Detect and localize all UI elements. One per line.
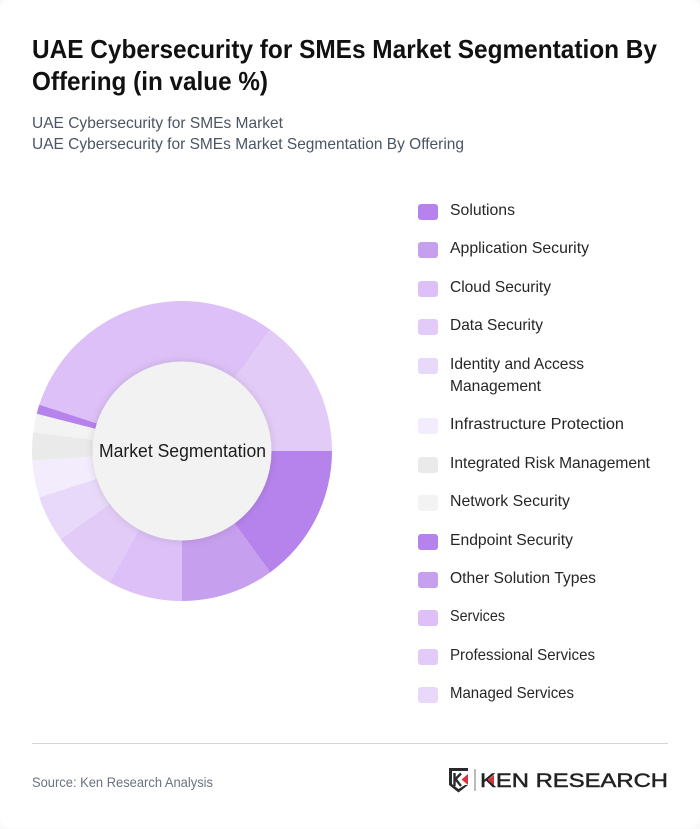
icon: shield (449, 768, 468, 792)
legend item: Identity and Access Management: Identity and Access (450, 356, 584, 373)
centre label: Market Segmentation (99, 441, 266, 461)
legend item: Services: Services (450, 608, 505, 625)
segment: Data Security (61, 451, 182, 582)
subtitle: UAE Cybersecurity for SMEs Market (32, 115, 284, 132)
donut chart (32, 301, 332, 601)
segment: Infrastructure Protection (32, 451, 182, 497)
segment: Integrated Risk Management (32, 432, 182, 460)
subtitle (32, 115, 464, 153)
segment: Services (39, 301, 270, 451)
legend (418, 202, 651, 703)
segment: Network Security (33, 414, 182, 451)
legend item: Services (418, 608, 505, 626)
legend item: Application Security: Application Security (450, 240, 589, 257)
segment: Solutions (182, 451, 332, 572)
segment: Application Security (182, 451, 270, 601)
donut centre (92, 362, 272, 540)
segment: Professional Services (182, 330, 332, 451)
legend item: Professional Services: Professional Services (450, 647, 595, 664)
title (32, 34, 658, 96)
legend item: Solutions (418, 202, 515, 220)
legend item: Cloud Security: Cloud Security (450, 279, 551, 296)
legend item: Data Security (418, 317, 543, 335)
title: Offering (in value %) (32, 66, 268, 96)
segment: Identity and Access Management (39, 451, 182, 539)
legend item: Other Solution Types: Other Solution Types (450, 570, 596, 587)
segment: Cloud Security (110, 451, 182, 601)
legend item: Managed Services: Managed Services (450, 685, 574, 702)
segment: Endpoint Security (37, 405, 182, 451)
legend item: Infrastructure Protection: Infrastructure Protection (450, 416, 624, 433)
subtitle: UAE Cybersecurity for SMEs Market Segmentation By Offering (32, 136, 464, 153)
legend item: Identity and Access Management (418, 356, 584, 395)
source note: Source: Ken Research Analysis (32, 774, 213, 790)
title: UAE Cybersecurity for SMEs Market Segmentation By (32, 34, 658, 64)
legend item: Endpoint Security: Endpoint Security (450, 532, 573, 549)
legend item: Identity and Access Management: Management (450, 378, 542, 395)
legend item: Data Security: Data Security (450, 317, 543, 334)
logo: Ken Research (449, 768, 668, 792)
logo wordmark: KEN RESEARCH (480, 770, 668, 792)
legend item: Network Security: Network Security (450, 493, 570, 510)
legend item: Solutions: Solutions (450, 202, 515, 219)
legend item: Integrated Risk Management: Integrated Risk Management (450, 455, 651, 472)
